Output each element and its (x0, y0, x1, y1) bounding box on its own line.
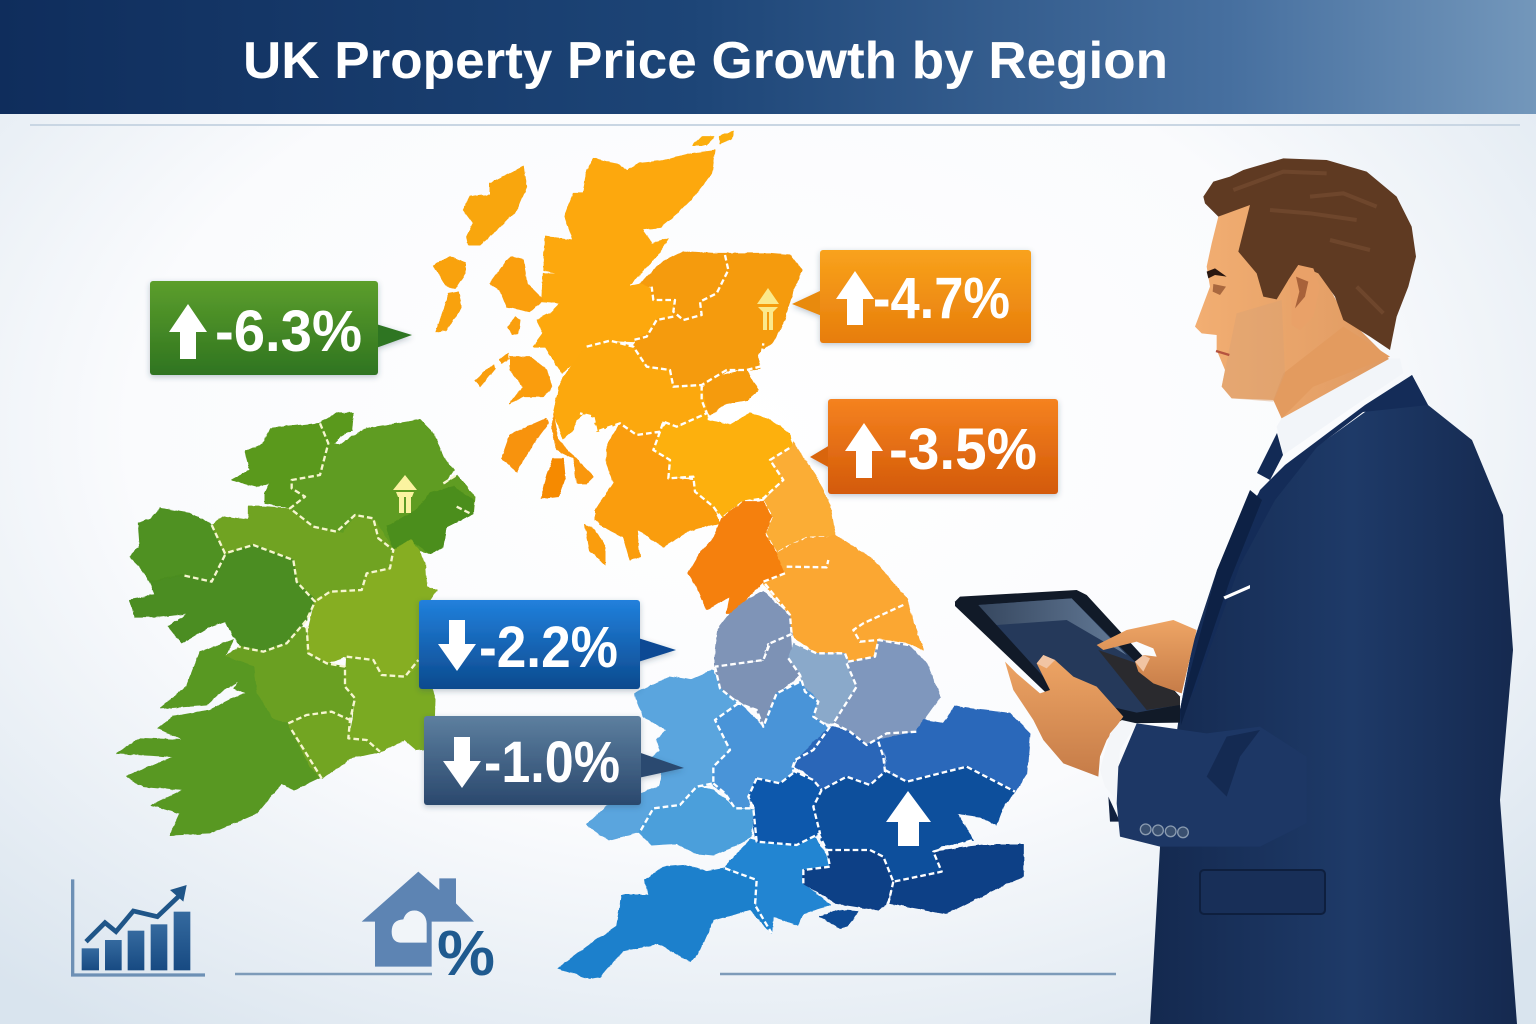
neck shadow (1273, 327, 1390, 418)
eye (1213, 284, 1226, 295)
dark front edge (1180, 490, 1262, 725)
head and neck (1195, 158, 1416, 455)
north regions (433, 132, 835, 565)
south regions (558, 502, 1030, 978)
pocket square (1223, 585, 1250, 599)
screen highlight (978, 598, 1127, 655)
eyebrow (1207, 268, 1227, 278)
icon: house with percent (362, 872, 495, 989)
hair highlights (1233, 172, 1383, 313)
mouth (1216, 351, 1229, 355)
tie (1257, 433, 1283, 480)
icon: house with percent: % (437, 917, 495, 989)
icon: bar chart (73, 879, 205, 975)
right hand (1097, 620, 1197, 693)
callout: orange -4.7% (792, 250, 1031, 343)
lapel (1180, 375, 1428, 710)
tablet body (955, 590, 1180, 723)
sleeve buttons (1140, 824, 1188, 838)
icon: white up arrow London (886, 791, 931, 846)
callout: slate -1.0% (424, 716, 684, 805)
tablet screen (978, 598, 1178, 713)
icon: small up arrow Scotland (757, 288, 779, 330)
callout: green -6.3%: -6.3% (215, 299, 362, 364)
base lines (235, 973, 1116, 975)
callout: slate -1.0%: -1.0% (484, 730, 620, 795)
inner ear (1295, 277, 1308, 308)
suit jacket (1150, 375, 1517, 1024)
skin (1195, 203, 1390, 418)
sleeve (1117, 723, 1307, 847)
callout: orange -4.7%: -4.7% (873, 266, 1010, 331)
callout: orange-red -3.5%: -3.5% (889, 417, 1037, 482)
left hand (1005, 655, 1123, 777)
callout: orange-red -3.5% (810, 399, 1058, 494)
jacket edge behind arm (1108, 797, 1120, 822)
screen reflection (1098, 650, 1180, 710)
header band (0, 0, 1536, 114)
ear (1288, 265, 1320, 330)
title: UK Property Price Growth by Region (243, 32, 1168, 90)
sleeve fold (1207, 730, 1260, 797)
callout: green -6.3% (150, 281, 412, 375)
south region borders (640, 560, 1015, 933)
map: Ireland (117, 413, 475, 835)
Ireland region borders (182, 423, 470, 778)
figure: businessman with tablet (955, 158, 1517, 1024)
north region borders (580, 255, 827, 553)
right thumb nail (1135, 655, 1150, 672)
tablet and arms (955, 585, 1307, 847)
map: Scotland and northern England (433, 132, 835, 565)
callout: blue -2.2%: -2.2% (479, 615, 618, 680)
pocket flap (1200, 870, 1325, 914)
map: Midlands and southern England (558, 502, 1030, 978)
callout: blue -2.2% (419, 600, 676, 689)
hair (1203, 158, 1416, 350)
shirt collar (1277, 358, 1403, 455)
shirt cuff (1100, 720, 1137, 800)
jaw stubble (1222, 300, 1285, 402)
icon: small up arrow Ireland (393, 475, 417, 513)
left thumb nail (1037, 655, 1055, 668)
Ireland regions (117, 413, 475, 835)
